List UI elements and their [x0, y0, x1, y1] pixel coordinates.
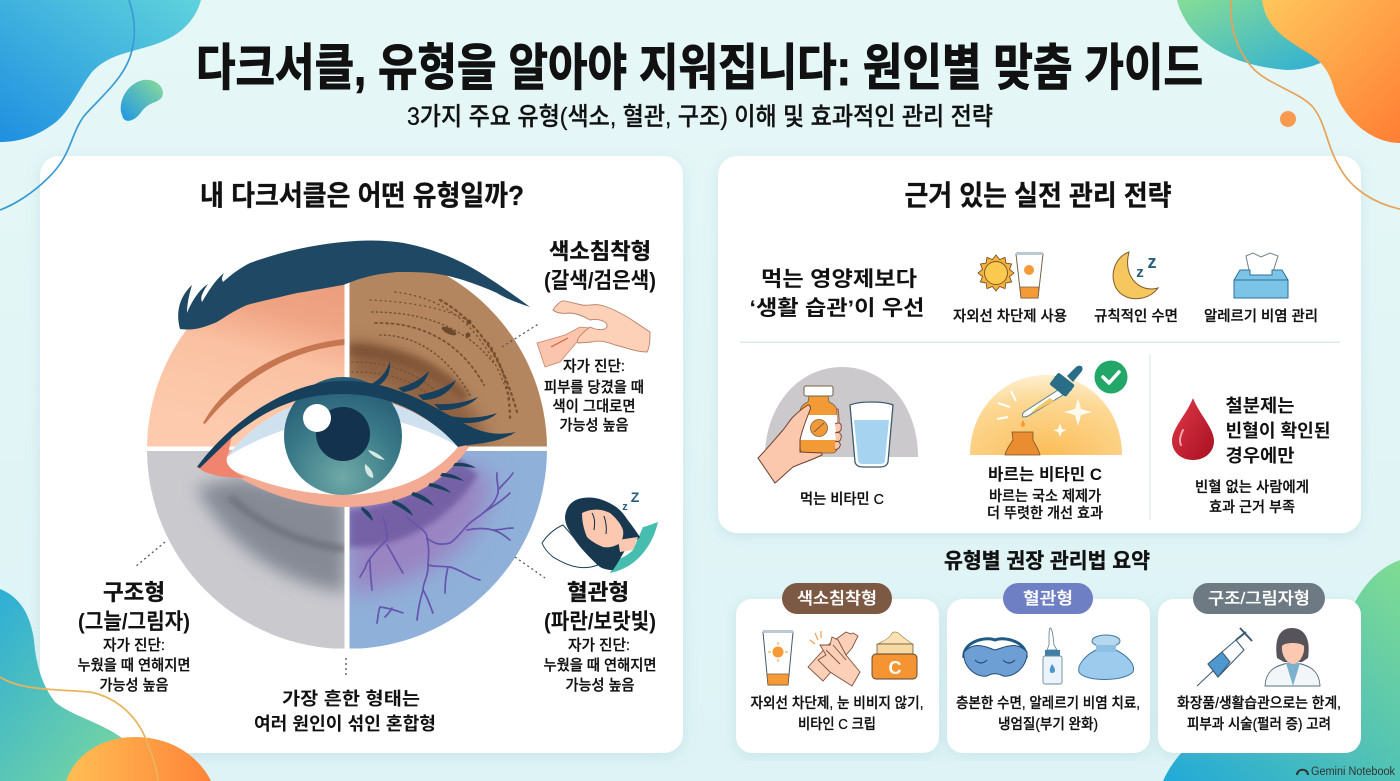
- label: topical vitamin C: 더 뚜렷한 개선 효과: [987, 505, 1103, 522]
- icon: vitamin C cream: C: [888, 658, 902, 678]
- illustration: oral vitamin C: [758, 367, 918, 483]
- icon: moon: z: [1148, 252, 1156, 272]
- eye white: [227, 396, 458, 495]
- label: vascular type: 가능성 높음: [566, 677, 635, 694]
- label: pigmented type: 가능성 높음: [560, 417, 629, 434]
- card: pigmented: 비타인 C 크립: [798, 716, 876, 733]
- label: vascular type: 자가 진단:: [568, 637, 630, 654]
- pill: structural: [1193, 583, 1325, 614]
- subtitle: 3가지 주요 유형(색소, 혈관, 구조) 이해 및 효과적인 관리 전략: [407, 103, 993, 131]
- icon: syringe: [1197, 628, 1252, 686]
- card: pigmented: 자외선 차단제, 눈 비비지 않기,: [750, 695, 924, 712]
- label: oral vitamin C: 먹는 비타민 C: [800, 491, 884, 508]
- iron supplement note: 효과 근거 부족: [1209, 499, 1295, 516]
- card: vascular: 층본한 수면, 알레르기 비염 치료,: [956, 695, 1140, 712]
- icon: moon: z: [1136, 264, 1144, 281]
- label: structural type: 누웠을 때 연해지면: [78, 657, 190, 674]
- background blob: bottom left orange: [66, 737, 211, 781]
- note: mixed type: 가장 흔한 형태는: [282, 689, 420, 709]
- quadrant: lower left structural shadow: [147, 451, 344, 648]
- icon: sleep mask: [964, 639, 1027, 676]
- pill: vascular: 혈관형: [1023, 589, 1073, 608]
- label: pigmented type: 색이 그대로면: [552, 398, 636, 415]
- eye lower lid: [197, 440, 469, 507]
- iris: [284, 377, 402, 495]
- divider horizontal: [740, 342, 1340, 343]
- eye highlights: [303, 404, 385, 478]
- pill: structural: 구조/그림자형: [1208, 589, 1310, 608]
- label: structural type: 자가 진단:: [103, 637, 165, 654]
- card: structural: 피부과 시술(펄러 증) 고려: [1187, 716, 1331, 733]
- panel: dark circle types: [40, 156, 683, 753]
- label: sunscreen: 자외선 차단제 사용: [953, 308, 1067, 325]
- lower lashes: [361, 463, 476, 521]
- icon: doctor: [1265, 628, 1320, 686]
- habits heading: 먹는 영양제보다: [761, 268, 917, 291]
- icon: sun: [978, 255, 1014, 291]
- decorative curve: left: [0, 0, 134, 210]
- card: pigmented: [736, 583, 939, 753]
- quadrant: lower right vascular: [350, 451, 547, 648]
- note: mixed type: 여러 원인이 섞인 혼합형: [254, 714, 436, 734]
- iron supplement note: 빈혈이 확인된: [1226, 421, 1330, 441]
- background blob: top left: [0, 0, 201, 142]
- icon: ice bag: [1079, 635, 1134, 680]
- right panel heading: 근거 있는 실전 관리 전략: [904, 180, 1172, 211]
- card: structural: [1158, 583, 1361, 753]
- label: topical vitamin C: 바르는 국소 제제가: [989, 488, 1101, 505]
- pill: pigmented: 색소침착형: [797, 589, 877, 608]
- icon: sleeping woman: [542, 489, 658, 573]
- label: allergy: 알레르기 비염 관리: [1204, 308, 1318, 325]
- icon: vitamin C cream: [872, 632, 917, 679]
- label: structural type: [78, 580, 190, 694]
- label: vascular type: 누웠을 때 연해지면: [544, 657, 656, 674]
- label: structural type: 가능성 높음: [100, 677, 169, 694]
- card: vascular: [947, 583, 1150, 753]
- label: pigmented type: 색소침착형: [549, 239, 651, 264]
- icon: green check badge: [1094, 360, 1128, 394]
- pill: pigmented: [782, 583, 892, 614]
- background blob: bottom left teal: [0, 589, 150, 781]
- label: vascular type: (파란/보랏빛): [544, 609, 656, 634]
- card: structural: 화장품/생활습관으로는 한계,: [1177, 695, 1341, 712]
- label: pigmented type: 자가 진단:: [563, 358, 625, 375]
- iron supplement note: 철분제는: [1226, 396, 1294, 416]
- title: 다크서클, 유형을 알아야 지워집니다: 원인별 맞춤 가이드: [196, 40, 1203, 96]
- iron supplement note: 경우에만: [1226, 446, 1295, 466]
- icon: sunscreen: [763, 630, 793, 685]
- decorative curve: bottom left: [0, 677, 158, 781]
- label: vascular type: [544, 580, 656, 694]
- label: structural type: (그늘/그림자): [78, 609, 190, 634]
- icon: pinching hand: [537, 301, 650, 367]
- card: vascular: 냉엄질(부기 완화): [998, 716, 1098, 733]
- icon: moon: [1113, 252, 1158, 299]
- label: pigmented type: 피부를 당겼을 때: [544, 379, 644, 396]
- summary heading: 유형별 권장 관리법 요약: [944, 550, 1150, 573]
- illustration: topical vitamin C: [970, 366, 1122, 455]
- iron supplement note: 빈혈 없는 사람에게: [1195, 479, 1309, 496]
- eye upper shade: [227, 396, 458, 457]
- label: pigmented type: [544, 239, 656, 434]
- icon: tissue box: [1234, 253, 1288, 298]
- background blob: top right orange: [1262, 0, 1400, 143]
- label: structural type: 구조형: [103, 580, 165, 605]
- label: vascular type: 혈관형: [567, 580, 629, 605]
- background blob: top right green: [1177, 0, 1330, 70]
- iron supplement note: [1195, 396, 1330, 516]
- icon: sleeping woman: z: [622, 501, 628, 513]
- eyebrow: [178, 240, 530, 330]
- eye diagram: [147, 240, 547, 649]
- label: pigmented type: (갈색/검은색): [544, 268, 656, 293]
- label: regular sleep: 규칙적인 수면: [1094, 308, 1178, 325]
- upper lashes: [371, 361, 514, 439]
- background blob: bottom right: [1163, 560, 1400, 781]
- eye inner corner: [198, 436, 245, 478]
- habits heading: ‘생활 습관’이 우선: [750, 297, 924, 320]
- icon: sleeping woman: Z: [631, 489, 640, 505]
- upper eyelid line: [197, 381, 516, 468]
- quadrant: upper right pigmented: [350, 272, 547, 446]
- habits heading: [750, 268, 924, 320]
- pill: vascular: [1003, 583, 1093, 614]
- leader lines: [135, 323, 545, 678]
- icon: blood drop: [1172, 398, 1214, 460]
- background blob: small bean: [121, 80, 163, 121]
- label: topical vitamin C: [987, 465, 1103, 522]
- panel: evidence-based care strategy: [718, 156, 1361, 533]
- watermark: Gemini Notebook: [1311, 766, 1395, 778]
- label: topical vitamin C: 바르는 비타민 C: [988, 465, 1102, 484]
- decorative curve: right: [1231, 0, 1400, 209]
- icon: sunscreen tube: [1016, 252, 1043, 298]
- quadrant: upper left skin: [147, 284, 344, 446]
- note: mixed type: [254, 689, 436, 734]
- icon: nasal spray: [1043, 628, 1062, 684]
- left panel heading: 내 다크서클은 어떤 유형일까?: [200, 180, 524, 211]
- divider vertical: [1150, 354, 1151, 520]
- pupil: [316, 407, 370, 461]
- orange dot: [1280, 111, 1296, 127]
- icon: hands: [808, 631, 860, 686]
